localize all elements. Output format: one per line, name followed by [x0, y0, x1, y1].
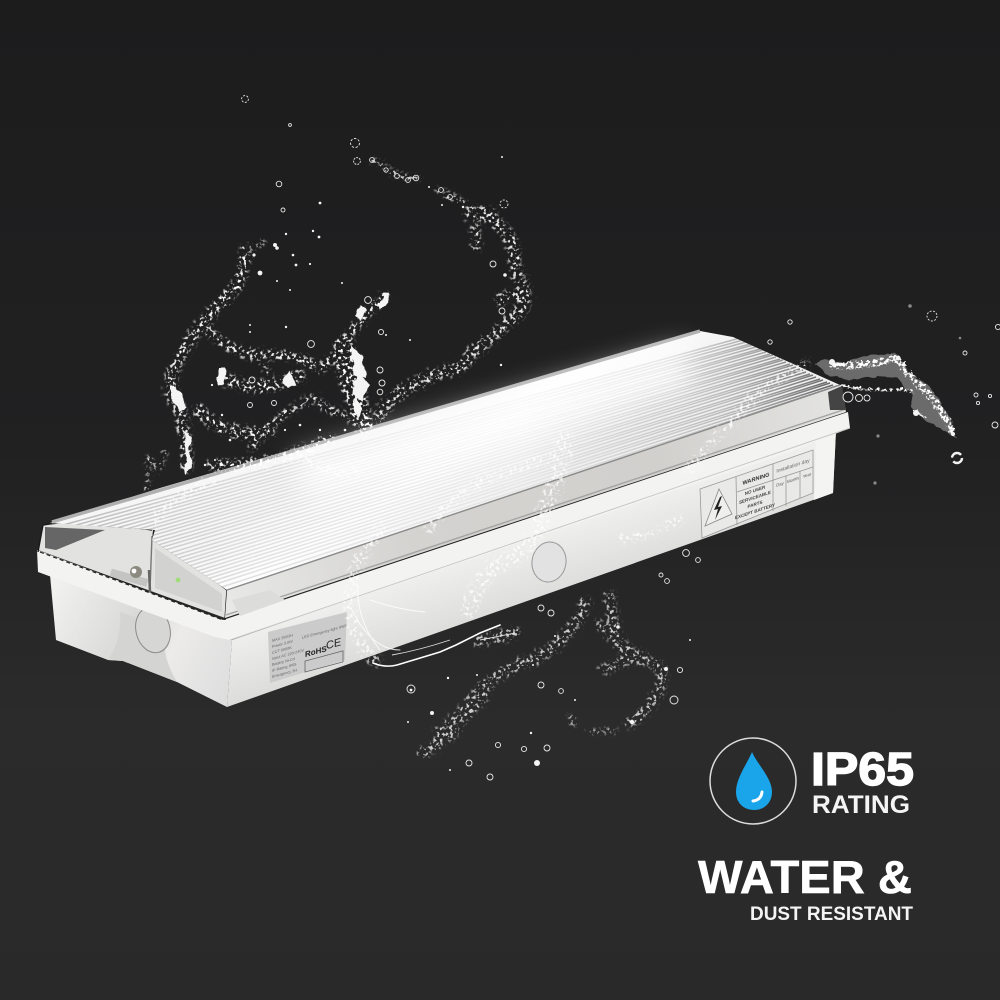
icon: water drop in circle [710, 738, 796, 824]
water splash: below the fixture [373, 550, 700, 780]
IP65 badge [710, 738, 914, 824]
rating label: RoHS [305, 644, 327, 659]
white rim [37, 412, 850, 640]
base: knockout circle [131, 604, 175, 656]
ribbed diffuser top [50, 331, 840, 590]
water splash: across the fixture [155, 365, 805, 660]
rating label: Emergency 3H [272, 668, 297, 679]
water heading: WATER & [698, 851, 912, 903]
warning label: PARTS [748, 499, 762, 509]
hazard triangle icon [705, 489, 732, 526]
emergency light fixture [37, 331, 850, 707]
water splash: upper right arc [350, 138, 527, 417]
dust resistant subheading: DUST RESISTANT [750, 903, 913, 925]
base: front end face [50, 575, 232, 707]
right-hand bright edge [814, 430, 836, 500]
rating label: MAX 3W/3H [272, 633, 293, 643]
warning label: Day [776, 480, 785, 488]
rating label: Power 3.0W [272, 639, 293, 649]
grey back edge [52, 331, 700, 522]
water and dust resistant caption [698, 851, 913, 925]
rating label: CE [326, 636, 341, 652]
transparent end cap [38, 522, 227, 620]
rating label: IP Rating IP65 [272, 662, 296, 673]
warning label [700, 450, 813, 538]
water splash: right side [768, 304, 1000, 485]
side knockout circle [529, 539, 569, 585]
warning label: Year [803, 471, 812, 479]
water splash: upper left arc [147, 96, 411, 490]
warning label: Month [787, 475, 799, 484]
rating label: CCT 6000K [272, 646, 292, 655]
rating label: Battery Ni-Cd [272, 657, 295, 667]
IP65 heading: IP65 [811, 743, 914, 795]
base: end recess [108, 612, 177, 682]
rating label [268, 612, 347, 683]
rating text: RATING [812, 791, 910, 819]
diffuser glow [300, 366, 690, 480]
base: long side face [227, 430, 836, 707]
warning label: NO USER [745, 484, 766, 496]
rating label: Input AC 220-240V [272, 648, 304, 661]
hinge latch [110, 566, 150, 592]
warning label: Installation day [776, 458, 810, 475]
glass front band [225, 385, 846, 618]
warning label: WARNING [742, 472, 770, 487]
green indicator [176, 578, 180, 582]
infographic canvas [37, 95, 1000, 920]
rating label: LED Emergency light IP65 [302, 624, 346, 640]
warning label: EXCEPT BATTERY [735, 502, 775, 520]
warning label: SERVICEABLE [739, 490, 771, 505]
